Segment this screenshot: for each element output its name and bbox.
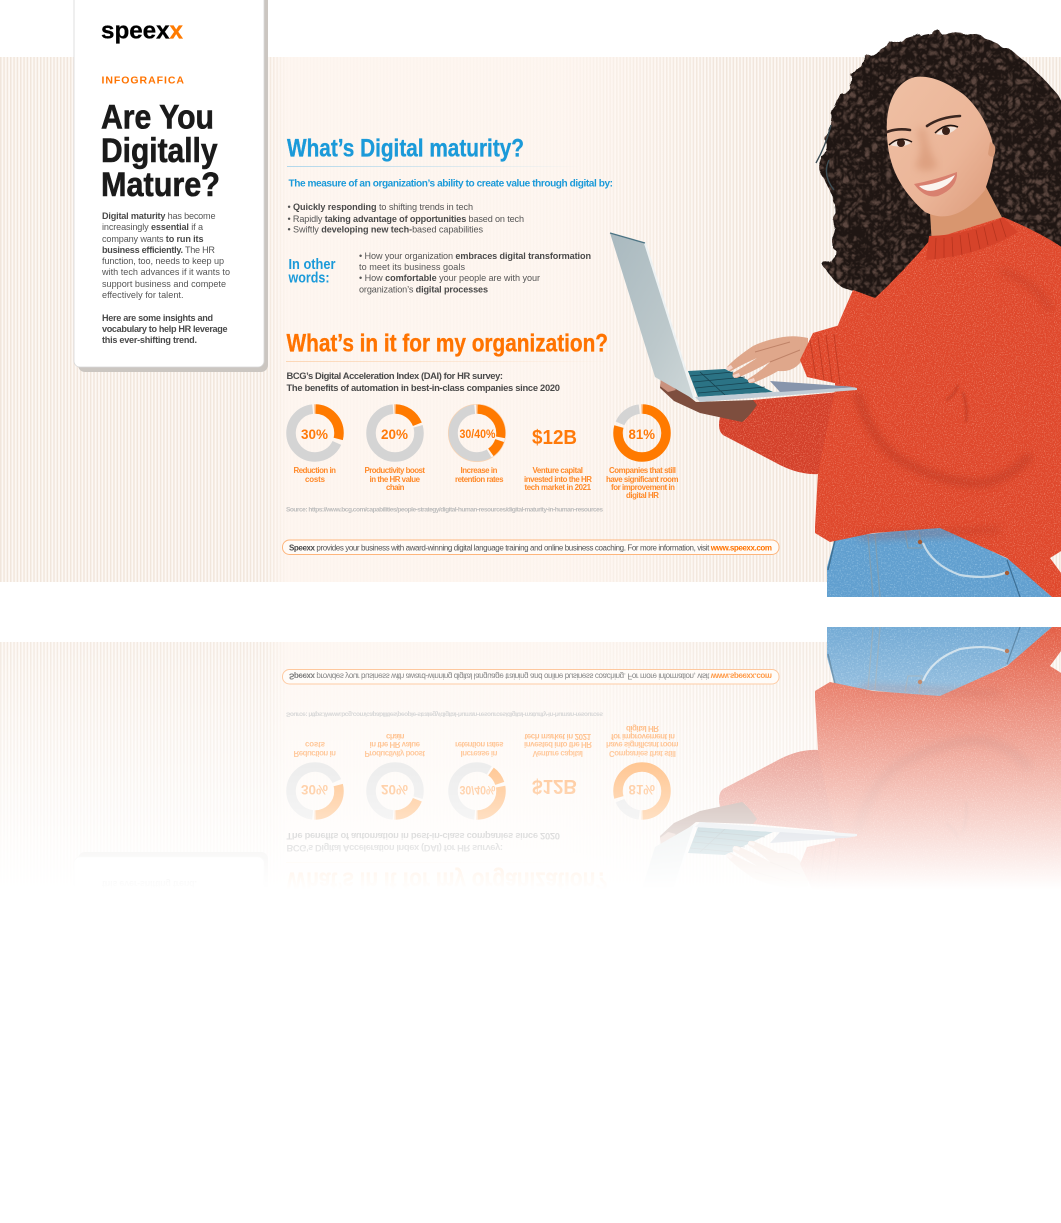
bullet list bbox=[288, 202, 524, 235]
survey intro: The benefits of automation in best-in-class companies since 2020 bbox=[286, 382, 560, 393]
source note: Source: https://www.bcg.com/capabilities/people-strategy/digital-human-resources/digital-maturity-in-human-resources bbox=[286, 507, 603, 514]
title: Mature? bbox=[101, 166, 220, 204]
bullet list: • Swiftly developing new tech-based capabilities bbox=[288, 225, 483, 235]
logo: speexx bbox=[101, 18, 184, 44]
intro text: increasingly essential if a bbox=[102, 222, 204, 232]
foreground sleeve cuff bbox=[800, 325, 873, 388]
mirrored reflection of the infographic: have significant room bbox=[606, 740, 678, 749]
bullet list: • Quickly responding to shifting trends in tech bbox=[288, 202, 473, 212]
mirrored reflection of the infographic: Productivity boost bbox=[364, 749, 425, 758]
eyes bbox=[890, 140, 911, 147]
mirrored reflection of the infographic: Speexx provides your business with award-winning digital language training and online business coaching. For more information, visit www.speexx.com bbox=[289, 671, 772, 680]
stat: 81%: digital HR bbox=[626, 491, 659, 500]
mirrored reflection of the infographic: 30% bbox=[301, 782, 329, 798]
hair wisp bbox=[816, 125, 834, 190]
stat: 30%: 30% bbox=[301, 426, 329, 442]
stat: 20%: chain bbox=[386, 483, 405, 492]
stat: $12B bbox=[524, 427, 592, 492]
mirrored reflection of the infographic: 81% bbox=[628, 782, 656, 798]
stat: 81%: Companies that still bbox=[609, 466, 676, 475]
mirrored reflection of the infographic: invested into the HR bbox=[524, 740, 592, 749]
intro text: vocabulary to help HR leverage bbox=[102, 324, 228, 334]
title bbox=[101, 98, 220, 204]
intro text: business efficiently. The HR bbox=[102, 245, 215, 255]
face bbox=[887, 77, 995, 216]
label infografica: INFOGRAFICA bbox=[102, 74, 184, 86]
laptop base bbox=[695, 387, 857, 402]
typing hand bbox=[726, 336, 808, 383]
definition list: organization’s digital processes bbox=[359, 285, 488, 295]
heading: What’s Digital maturity? bbox=[287, 135, 524, 163]
stat: 81%: have significant room bbox=[606, 475, 678, 484]
mirrored reflection of the infographic: Increase in bbox=[460, 749, 498, 758]
in other words: words: bbox=[288, 271, 330, 287]
person with laptop photo illustration bbox=[610, 32, 1061, 597]
stat: $12B: tech market in 2021 bbox=[524, 483, 592, 492]
stat: 81% bbox=[606, 409, 678, 500]
mirrored reflection of the infographic: tech market in 2021 bbox=[524, 732, 592, 741]
intro text: this ever-shifting trend. bbox=[102, 335, 197, 345]
mirrored reflection of the infographic: Reduction in bbox=[294, 749, 336, 758]
mirrored reflection of the infographic: Venture capital bbox=[532, 749, 583, 758]
stat: 20%: Productivity boost bbox=[364, 466, 425, 475]
stat: 81%: for improvement in bbox=[611, 483, 675, 492]
eyebrows bbox=[887, 116, 960, 132]
definition list bbox=[359, 251, 591, 295]
mirrored reflection of the infographic: $12B bbox=[532, 775, 577, 797]
laptop bbox=[610, 233, 857, 402]
mirrored reflection of the infographic: chain bbox=[386, 732, 405, 741]
intro text: effectively for talent. bbox=[102, 290, 184, 300]
mirrored reflection of the infographic: 20% bbox=[381, 782, 409, 798]
stat: 20% bbox=[364, 409, 425, 492]
intro text: company wants to run its bbox=[102, 234, 204, 244]
stat: 30/40% bbox=[448, 404, 506, 484]
stat: 30/40%: Increase in bbox=[460, 466, 498, 475]
definition list: to meet its business goals bbox=[359, 262, 465, 272]
footer callout: Speexx provides your business with award-winning digital language training and online business coaching. For more information, visit www.speexx.com bbox=[289, 544, 772, 553]
mirrored reflection of the infographic: vocabulary to help HR leverage bbox=[102, 890, 228, 900]
heading: What’s in it for my organization? bbox=[286, 330, 608, 358]
mirrored reflection of the infographic: this ever-shifting trend. bbox=[102, 879, 197, 889]
survey intro: BCG’s Digital Acceleration Index (DAI) for HR survey: bbox=[286, 370, 503, 381]
mirrored reflection of the infographic: What’s in it for my organization? bbox=[286, 866, 608, 894]
back hand bbox=[659, 363, 757, 422]
side card bbox=[74, 0, 268, 372]
collar bbox=[926, 217, 1018, 260]
subheading: The measure of an organization’s ability to create value through digital by: bbox=[288, 179, 613, 190]
in other words: In other bbox=[288, 257, 336, 273]
stat: 30% bbox=[291, 409, 339, 484]
mirrored reflection of the infographic: BCG’s Digital Acceleration Index (DAI) for HR survey: bbox=[286, 843, 503, 854]
jeans bbox=[827, 526, 1052, 597]
bullet list: • Rapidly taking advantage of opportunities based on tech bbox=[288, 214, 524, 224]
laptop lid bbox=[610, 233, 695, 400]
stat: 30%: costs bbox=[305, 475, 326, 484]
stat: $12B: $12B bbox=[532, 427, 577, 449]
intro text: support business and compete bbox=[102, 279, 226, 289]
mirrored reflection of the infographic: 30/40% bbox=[460, 783, 496, 797]
stat: 30/40%: 30/40% bbox=[460, 427, 496, 441]
definition list: • How your organization embraces digital transformation bbox=[359, 251, 591, 261]
definition list: • How comfortable your people are with your bbox=[359, 273, 540, 283]
hair bbox=[820, 32, 1061, 315]
mirrored reflection of the infographic: Companies that still bbox=[609, 749, 676, 758]
sweater shading folds bbox=[857, 270, 1050, 536]
section: digital maturity bbox=[287, 135, 613, 295]
intro text: Here are some insights and bbox=[102, 313, 213, 323]
stat: 30/40%: retention rates bbox=[455, 475, 504, 484]
card panel bbox=[74, 0, 264, 367]
laptop keyboard bbox=[688, 369, 773, 397]
mirrored reflection of the infographic: The benefits of automation in best-in-class companies since 2020 bbox=[286, 831, 560, 842]
mirrored reflection of the infographic bbox=[0, 627, 1061, 880]
background striped band bbox=[0, 57, 1061, 582]
survey intro bbox=[286, 370, 560, 393]
intro text: function, too, needs to keep up bbox=[102, 256, 224, 266]
title: Digitally bbox=[101, 132, 218, 170]
stat: $12B: invested into the HR bbox=[524, 475, 592, 484]
neck bbox=[930, 187, 1002, 236]
footer callout bbox=[282, 540, 779, 554]
mirrored reflection of the infographic: retention rates bbox=[455, 740, 504, 749]
stat: 20%: in the HR value bbox=[370, 475, 421, 484]
stat: 81%: 81% bbox=[628, 426, 656, 442]
stat: 30%: Reduction in bbox=[294, 466, 336, 475]
mirrored reflection of the infographic: Source: https://www.bcg.com/capabilities/people-strategy/digital-human-resources/digital-maturity-in-human-resources bbox=[286, 710, 603, 717]
card shadow bbox=[78, 0, 268, 372]
mirrored reflection of the infographic: for improvement in bbox=[611, 732, 675, 741]
stat: $12B: Venture capital bbox=[532, 466, 583, 475]
stat: 20%: 20% bbox=[381, 426, 409, 442]
smile bbox=[914, 172, 957, 196]
section: what's in it bbox=[286, 330, 678, 514]
mirrored reflection of the infographic: costs bbox=[305, 740, 326, 749]
mirrored reflection of the infographic: digital HR bbox=[626, 724, 659, 733]
in other words bbox=[288, 257, 336, 287]
main infographic bbox=[0, 0, 1061, 597]
mirrored reflection of the infographic: in the HR value bbox=[370, 740, 421, 749]
intro text bbox=[101, 211, 230, 345]
back arm sleeve bbox=[719, 392, 840, 474]
intro text: Digital maturity has become bbox=[102, 211, 216, 221]
intro text: with tech advances if it wants to bbox=[101, 267, 230, 277]
title: Are You bbox=[101, 98, 214, 136]
sweater body bbox=[815, 217, 1061, 597]
